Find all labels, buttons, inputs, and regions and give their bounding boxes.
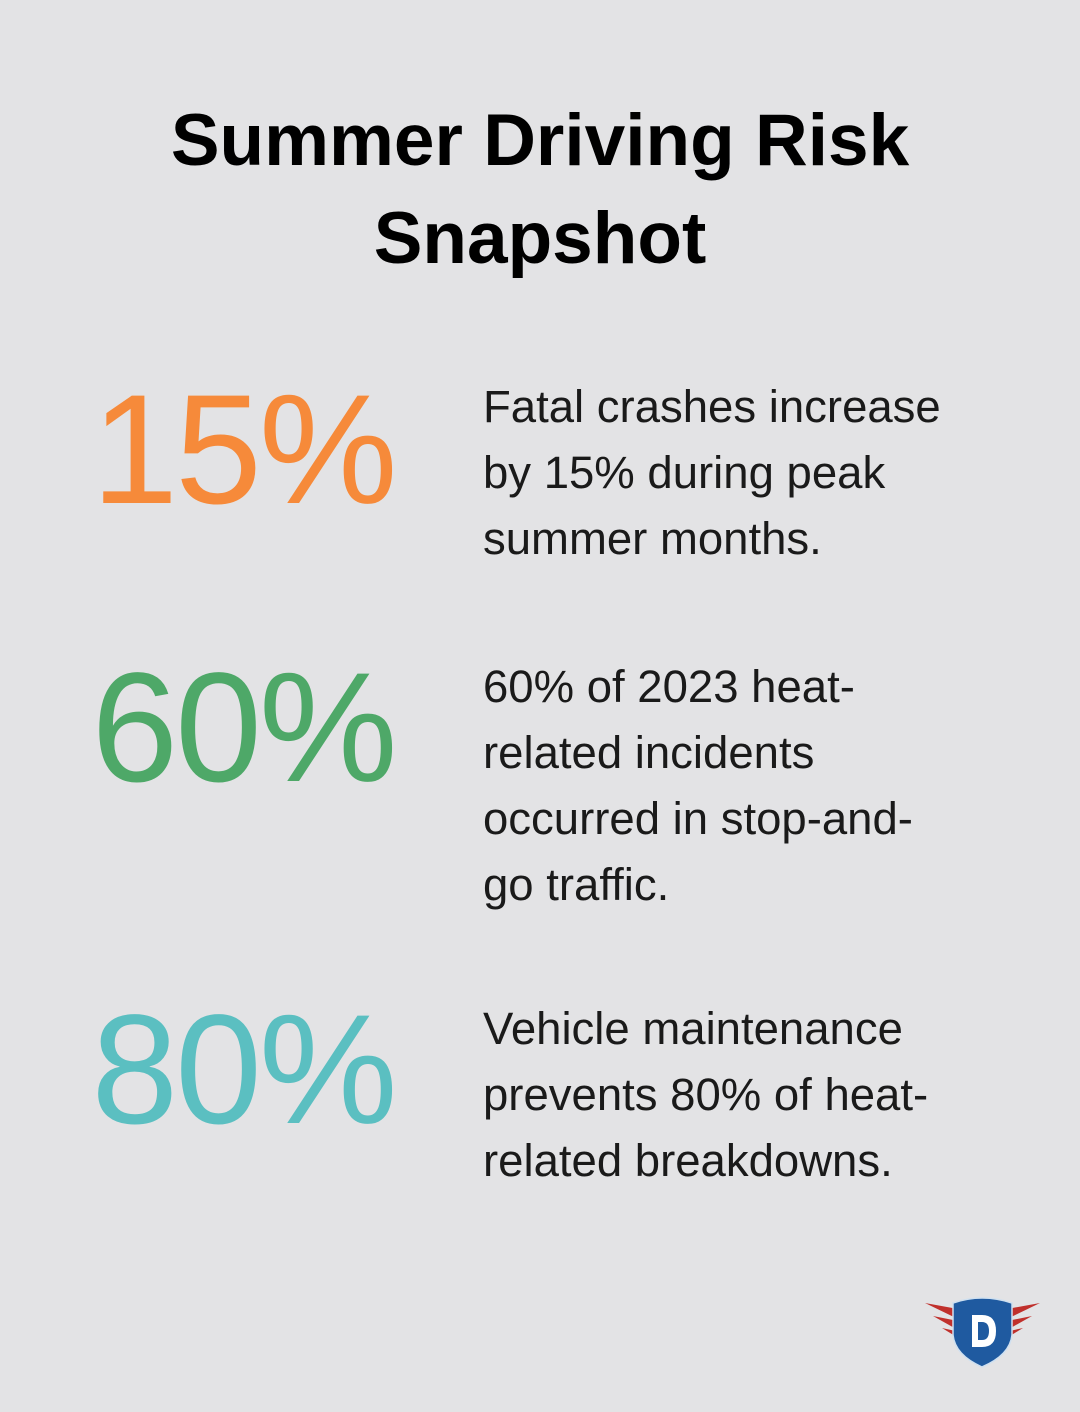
text: 60% description: 60% of 2023 heat- <box>483 661 855 712</box>
stat: 15%: 15% <box>91 363 395 537</box>
text: 15% description <box>483 381 941 564</box>
title <box>171 100 910 279</box>
title: Snapshot <box>374 198 706 279</box>
text: 80% description: Vehicle maintenance <box>483 1003 903 1054</box>
text: 60% description <box>483 661 913 910</box>
text: 80% description: related breakdowns. <box>483 1135 893 1186</box>
text: 60% description: related incidents <box>483 727 814 778</box>
text: 80% description: prevents 80% of heat- <box>483 1069 928 1120</box>
stat: 80%: 80% <box>91 983 395 1157</box>
text: 15% description: by 15% during peak <box>483 447 885 498</box>
logo <box>925 1297 1040 1368</box>
title: Summer Driving Risk <box>171 100 909 181</box>
text: 60% description: occurred in stop-and- <box>483 793 913 844</box>
text: 80% description <box>483 1003 928 1186</box>
text: 15% description: Fatal crashes increase <box>483 381 941 432</box>
text: 15% description: summer months. <box>483 513 822 564</box>
stat: 60%: 60% <box>91 641 395 815</box>
text: 60% description: go traffic. <box>483 859 669 910</box>
